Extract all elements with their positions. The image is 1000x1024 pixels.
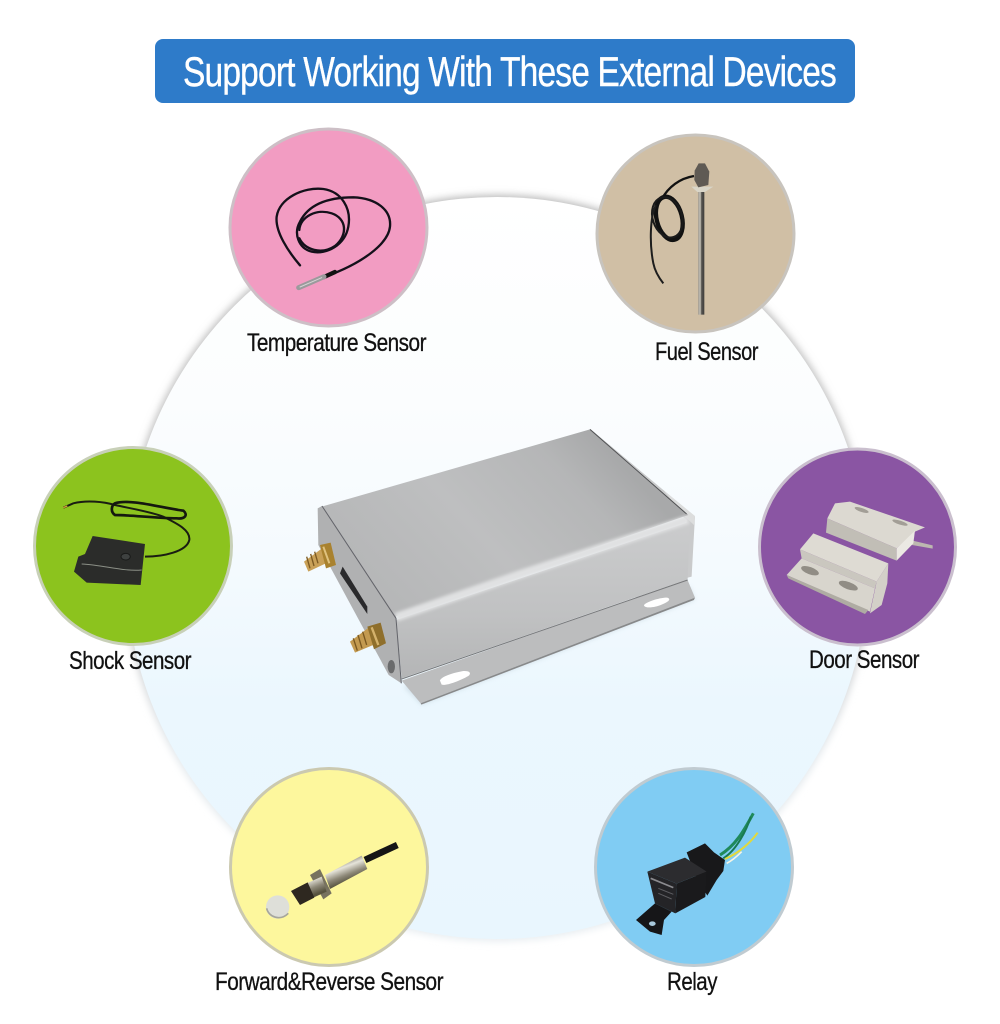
front face xyxy=(396,522,690,678)
title banner: Support Working With These External Devices xyxy=(183,48,836,95)
icon circle: temperature sensor xyxy=(230,129,427,326)
icon circle: fuel sensor xyxy=(597,135,794,332)
icon circle: forward and reverse sensor xyxy=(230,768,428,966)
label: fuel sensor: Fuel Sensor xyxy=(655,338,758,366)
label: door sensor: Door Sensor xyxy=(809,646,919,674)
panel: relay xyxy=(596,768,792,996)
icon: shock sensor box xyxy=(63,502,189,585)
bottom antenna connector xyxy=(350,623,386,653)
dark right edge xyxy=(590,429,687,514)
panel: temperature sensor xyxy=(230,129,427,357)
panel: shock sensor xyxy=(34,448,232,675)
icon: proximity sensor xyxy=(266,845,397,919)
icon: temperature probe cable xyxy=(277,189,390,288)
icon: magnetic door contacts xyxy=(787,502,933,614)
panel: door sensor xyxy=(760,449,956,674)
screw hole xyxy=(388,660,395,673)
top antenna connector xyxy=(304,543,336,572)
flange hole right xyxy=(644,598,669,607)
top face xyxy=(322,429,688,617)
title banner xyxy=(155,39,855,103)
panel: fuel sensor xyxy=(597,135,794,366)
mounting flange xyxy=(402,579,695,703)
icon circle: relay xyxy=(596,768,792,966)
label: forward and reverse sensor: Forward&Reverse Sensor xyxy=(215,968,443,996)
left end panel xyxy=(318,506,401,683)
icon: relay with wires xyxy=(636,813,758,935)
background circle xyxy=(124,195,870,941)
right end cap xyxy=(590,429,695,578)
label: temperature sensor: Temperature Sensor xyxy=(247,329,426,357)
flange hole left xyxy=(440,671,470,685)
icon circle: door sensor xyxy=(760,449,956,645)
label: relay: Relay xyxy=(667,968,718,996)
icon: fuel level rod xyxy=(647,163,713,315)
device shadow xyxy=(403,587,695,705)
central tracker device xyxy=(304,429,695,705)
sim slot xyxy=(340,567,367,614)
panel: forward and reverse sensor xyxy=(215,768,443,996)
rounded edge highlight xyxy=(396,519,688,617)
icon circle: shock sensor xyxy=(34,448,232,644)
label: shock sensor: Shock Sensor xyxy=(69,647,191,675)
